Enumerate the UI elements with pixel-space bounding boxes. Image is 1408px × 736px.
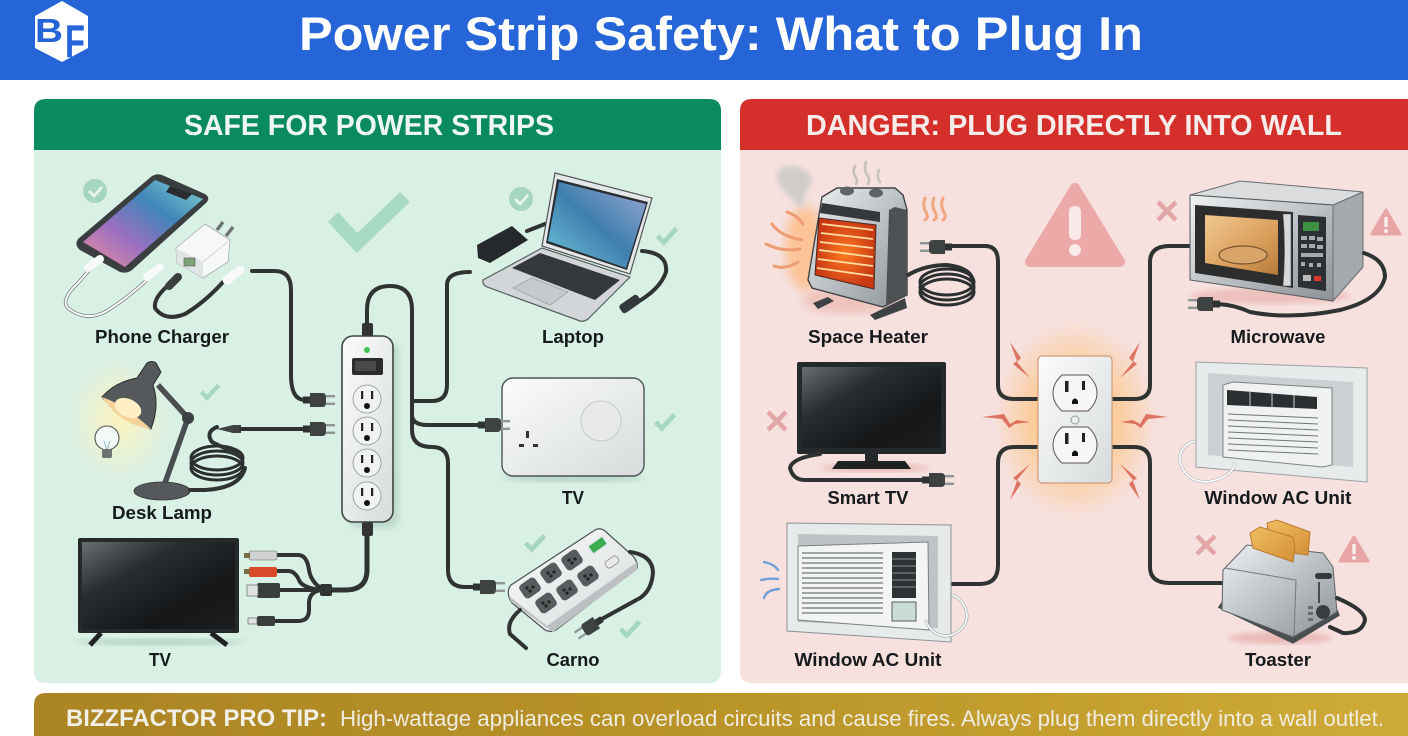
panel: danger plug directly into wall (740, 99, 1408, 683)
icon: sparks (982, 342, 1168, 500)
panel heading: danger (740, 99, 1408, 150)
icon: large check mark (333, 197, 405, 243)
logo: BF hexagon (35, 1, 88, 67)
logo: BF hexagon: B (35, 12, 63, 49)
panel: safe for power strips (34, 99, 721, 683)
power switch (352, 358, 383, 375)
icon: toaster (1197, 520, 1368, 644)
icon: white TV box (478, 378, 674, 482)
title: Power Strip Safety: What to Plug In (299, 7, 1143, 60)
label: Microwave (1230, 327, 1326, 347)
icon: smart TV (768, 362, 954, 487)
label: Desk Lamp (112, 503, 212, 523)
logo: BF hexagon: F (65, 15, 85, 67)
icon: laptop (477, 173, 676, 321)
power strip with cables (275, 272, 478, 621)
label: Toaster (1245, 650, 1311, 670)
label: Carno (546, 650, 600, 670)
icon: large warning triangle (1030, 188, 1120, 262)
label: Window AC Unit (1204, 488, 1352, 508)
panel heading: safe: SAFE FOR POWER STRIPS (184, 110, 554, 142)
icon: microwave (1158, 181, 1400, 316)
label: Space Heater (808, 327, 928, 347)
label: TV (562, 488, 584, 508)
wall outlet with cables (952, 246, 1224, 584)
header bar (0, 0, 1408, 80)
tip label: BIZZFACTOR PRO TIP: (66, 705, 327, 732)
label: Smart TV (828, 488, 908, 508)
icon: space heater (766, 162, 974, 320)
tip text: High-wattage appliances can overload circuits and cause fires. Always plug them directly into a wall outlet. (340, 706, 1384, 731)
icon: carno power strip (473, 529, 653, 648)
label: Window AC Unit (794, 650, 942, 670)
panel heading: danger: DANGER: PLUG DIRECTLY INTO WALL (806, 110, 1342, 142)
label: TV (149, 650, 171, 670)
icon: black TV with connectors (75, 538, 280, 645)
pro tip bar (34, 693, 1408, 736)
label: Phone Charger (95, 327, 229, 347)
icon: window AC unit left (761, 523, 967, 642)
panel heading: safe (34, 99, 721, 150)
outlets (353, 385, 381, 510)
icon: desk lamp (66, 358, 335, 500)
icon: window AC unit right (1180, 362, 1367, 482)
icon: phone charger (66, 174, 335, 407)
label: Laptop (542, 327, 604, 347)
